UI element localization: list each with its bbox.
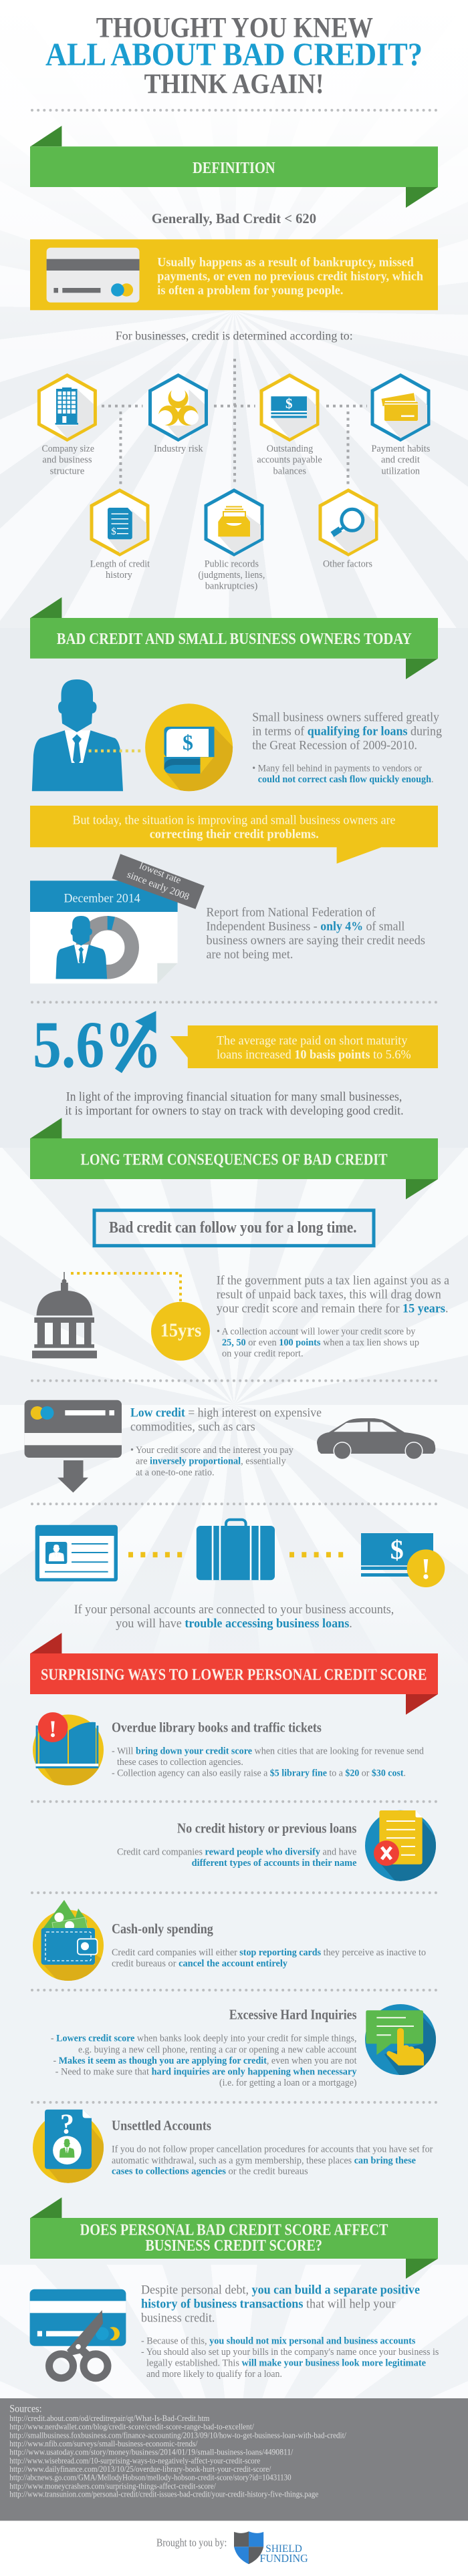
panel: sources — [0, 2398, 468, 2521]
label: utilization — [381, 466, 420, 476]
text: separate business history: and more likely to qualify for a loan. — [146, 2369, 282, 2380]
text: federation report: Independent Business - only 4% of small — [206, 920, 404, 934]
stat: 15 years circle: 15yrs — [160, 1321, 201, 1341]
text: separate business history: Despite personal debt, you can build a separate positive — [141, 2283, 420, 2297]
text: separate business history: - You should also set up your bills in the company's name once your business is — [141, 2347, 439, 2358]
label: Other factors — [323, 558, 372, 569]
banner: definition — [30, 126, 438, 208]
text — [112, 2117, 433, 2177]
callout: situation improving — [30, 806, 438, 864]
icon: car — [317, 1418, 435, 1459]
icon: business loan money with alert — [361, 1533, 445, 1587]
icon: briefcase — [197, 1520, 275, 1580]
ribbon: lowest rate since early 2008 — [112, 854, 205, 909]
callout text: payments, or even no previous credit history, which — [157, 269, 423, 283]
callout text — [157, 255, 423, 297]
text: separate business history: history of business transactions that will help your — [141, 2297, 396, 2311]
sponsor credit: SHIELD — [265, 2543, 302, 2555]
panel: december 2014 report calendar — [30, 880, 178, 983]
panel: sources: http://www.nerdwallet.com/blog/credit-score/credit-score-range-bad-to-excellent/ — [9, 2422, 254, 2432]
icon: gray credit card with down arrow — [25, 1400, 122, 1492]
icon: book with alert — [33, 1712, 104, 1785]
sponsor credit: Brought to you by: — [156, 2537, 227, 2549]
callout: average rate: loans increased 10 basis points to 5.6% — [217, 1048, 411, 1062]
text: federation report — [206, 906, 425, 962]
panel: sources: http://www.transunion.com/personal-credit/credit-issues-bad-credit/your-credit-history-five-things.page — [9, 2490, 319, 2499]
text: trouble accessing loans: you will have trouble accessing business loans. — [116, 1617, 352, 1631]
text: Credit card companies will either stop reporting cards they perceive as inactive to — [112, 1947, 426, 1958]
label — [257, 444, 322, 476]
icon: money circle — [145, 703, 233, 791]
text: - Collection agency can also easily raise a $5 library fine to a $20 or $30 cost. — [112, 1768, 406, 1778]
item: overdue library books — [33, 1712, 424, 1785]
label: bankruptcies) — [205, 581, 257, 592]
icon: business loan money with alert: $ — [390, 1535, 404, 1565]
factor: length of credit history — [90, 490, 150, 581]
banner: definition: DEFINITION — [193, 160, 275, 177]
text: tax lien: your credit score and remain there for 15 years. — [217, 1302, 449, 1316]
icon: questioned document: ? — [60, 2110, 74, 2140]
text: low credit: • Your credit score and the interest you pay — [130, 1445, 294, 1456]
text — [112, 1719, 424, 1778]
text: tax lien: on your credit report. — [222, 1349, 304, 1359]
text: trouble accessing loans: If your personal accounts are connected to your business accounts, — [74, 1603, 394, 1617]
text: separate business history: legally established. This will make your business look more legitimate — [146, 2358, 426, 2368]
banner: long term consequences — [30, 1118, 438, 1199]
text — [112, 1921, 426, 1969]
text: low credit: commodities, such as cars — [130, 1420, 255, 1434]
business credit intro: For businesses, credit is determined according to: — [116, 329, 353, 342]
factor: company size — [39, 375, 95, 476]
icon: money circle: $ — [183, 730, 193, 754]
text: low credit: are inversely proportional, essentially — [136, 1456, 286, 1467]
text: If you do not follow proper cancellation procedures for accounts that you have set for — [112, 2144, 433, 2155]
text: stay on track — [65, 1090, 404, 1118]
title — [45, 13, 423, 100]
sponsor credit: FUNDING — [259, 2552, 308, 2565]
icon: government building — [32, 1272, 97, 1358]
panel: sources: http://credit.about.com/od/creditrepair/qt/What-Is-Bad-Credit.htm — [9, 2414, 210, 2423]
callout: average rate — [170, 1025, 438, 1068]
factor: accounts payable: $ — [285, 395, 292, 412]
text: Overdue library books and traffic tickets — [112, 1719, 322, 1735]
callout: situation improving: But today, the situation is improving and small business owners are — [72, 813, 396, 827]
banner: does personal bad credit score affect business credit score — [30, 2197, 438, 2279]
text: recession impact: Small business owners suffered greatly — [252, 710, 439, 724]
ribbon: lowest rate since early 2008: since early 2008 — [126, 869, 191, 903]
label: Company size — [41, 444, 94, 454]
text: Unsettled Accounts — [112, 2117, 211, 2133]
text: - Need to make sure that hard inquiries are only happening when necessary — [55, 2066, 357, 2077]
stat: 15 years circle — [151, 1302, 210, 1361]
banner: does personal bad credit score affect business credit score: BUSINESS CREDIT SCORE? — [145, 2237, 322, 2255]
title: THINK AGAIN! — [144, 69, 324, 100]
callout text: Usually happens as a result of bankruptcy, missed — [157, 255, 414, 269]
text: recession impact — [252, 710, 442, 785]
text: (i.e. for getting a loan or a mortgage) — [219, 2078, 357, 2088]
icon: questioned document — [33, 2110, 104, 2183]
factor: accounts payable — [257, 375, 322, 476]
factor: other factors — [320, 490, 376, 569]
factor: payment habits — [371, 375, 430, 476]
panel: definition callout — [30, 239, 438, 310]
text: tax lien: • A collection account will lower your credit score by — [217, 1326, 416, 1337]
callout box: bad credit can follow you — [94, 1211, 374, 1246]
callout box: bad credit can follow you: Bad credit can follow you for a long time. — [109, 1219, 357, 1237]
text: - Lowers credit score when banks look deeply into your credit for simple things, — [51, 2034, 357, 2044]
icon: chat bubble with hand — [365, 2004, 436, 2075]
title: ALL ABOUT BAD CREDIT? — [45, 35, 423, 72]
item: cash-only spending — [33, 1900, 425, 1981]
icon: business loan money with alert: ! — [421, 1553, 431, 1585]
icon: business owner — [32, 679, 123, 791]
text: tax lien — [217, 1274, 450, 1359]
callout text: is often a problem for young people. — [157, 283, 343, 297]
text: stay on track: it is important for owners to stay on track with developing good credit. — [65, 1104, 404, 1118]
icon: shield logo — [234, 2531, 263, 2564]
title: THOUGHT YOU KNEW — [96, 13, 373, 44]
text: separate business history: business credit. — [141, 2311, 215, 2325]
label: history — [106, 570, 132, 581]
label: structure — [50, 466, 85, 476]
text: Cash-only spending — [112, 1921, 213, 1937]
text: No credit history or previous loans — [177, 1820, 357, 1836]
panel: sources: http://www.usatoday.com/story/money/business/2014/01/19/small-business-loans/4490811/ — [9, 2448, 294, 2457]
text: e.g. buying a new cell phone, renting a car or opening a new cable account — [78, 2044, 357, 2055]
text: recession impact: the Great Recession of 2009-2010. — [252, 738, 417, 752]
panel: sources: http://www.moneycrashers.com/surprising-things-affect-credit-score/ — [9, 2481, 216, 2490]
text — [117, 1820, 357, 1869]
label: Outstanding — [267, 444, 314, 454]
text: tax lien: 25, 50 or even 100 points when a tax lien shows up — [222, 1337, 419, 1348]
banner: surprising ways — [30, 1633, 438, 1715]
chart: 4% donut — [83, 916, 132, 972]
label: Industry risk — [154, 444, 203, 454]
text: low credit: at a one-to-one ratio. — [136, 1467, 214, 1478]
label: accounts payable — [257, 455, 322, 466]
text: low credit: Low credit = high interest on expensive — [130, 1406, 322, 1420]
factor: public records — [198, 490, 265, 592]
text: - Will bring down your credit score when cities that are looking for revenue send — [112, 1746, 424, 1757]
label: Payment habits — [371, 444, 430, 454]
label: Length of credit — [90, 558, 150, 569]
text: federation report: Report from National Federation of — [206, 906, 376, 920]
panel: sources: http://smallbusiness.foxbusiness.com/finance-accounting/2013/09/10/how-to-get-business-loan-with-bad-credit/ — [9, 2430, 346, 2440]
icon: rejected document — [365, 1810, 436, 1881]
text: separate business history: - Because of this, you should not mix personal and business accounts — [141, 2336, 416, 2346]
text: different types of accounts in their name — [192, 1858, 357, 1869]
ribbon: lowest rate since early 2008: lowest rate — [138, 860, 183, 886]
label: Public records — [205, 558, 259, 569]
icon: personal id card — [35, 1525, 118, 1581]
panel: december 2014 report calendar: December 2014 — [64, 892, 140, 906]
banner: does personal bad credit score affect business credit score: DOES PERSONAL BAD CREDIT SCORE AFFECT — [80, 2222, 388, 2239]
icon: small business owner — [55, 916, 107, 979]
icon: credit card back — [47, 248, 139, 303]
label: and credit — [381, 455, 421, 466]
text: separate business history — [141, 2283, 439, 2380]
text: cases to collections agencies or the credit bureaus — [112, 2166, 308, 2177]
text: automatic withdrawal, such as a gym membership, these places can bring these — [112, 2155, 416, 2166]
factor: industry risk — [150, 375, 206, 454]
callout: average rate: The average rate paid on short maturity — [217, 1033, 408, 1048]
text: federation report: are not being met. — [206, 948, 293, 962]
banner: bad credit and small business owners today: BAD CREDIT AND SMALL BUSINESS OWNERS TODAY — [57, 631, 412, 648]
panel: sources: Sources: — [9, 2404, 42, 2415]
dotted connectors — [102, 359, 367, 484]
text: recession impact: in terms of qualifying for loans during — [252, 724, 442, 738]
text: these cases to collection agencies. — [117, 1757, 243, 1768]
item: no credit history — [117, 1810, 441, 1884]
label: (judgments, liens, — [198, 570, 265, 581]
text: Excessive Hard Inquiries — [229, 2006, 357, 2022]
text: - Makes it seem as though you are applying for credit, even when you are not — [53, 2056, 357, 2066]
text: federation report: business owners are saying their credit needs — [206, 934, 425, 948]
icon: book with alert: ! — [49, 1716, 57, 1742]
stat: 5.6% with arrow: 5.6% — [33, 1007, 162, 1082]
callout: situation improving: correcting their credit problems. — [150, 827, 319, 841]
label — [198, 558, 265, 592]
sponsor credit — [156, 2531, 308, 2565]
factor: length of credit history: $ — [111, 526, 116, 537]
icon: credit card cut by scissors — [30, 2289, 126, 2378]
text: stay on track: In light of the improving financial situation for many small businesses, — [66, 1090, 402, 1104]
banner: long term consequences: LONG TERM CONSEQUENCES OF BAD CREDIT — [80, 1151, 388, 1168]
item: unsettled accounts — [33, 2110, 433, 2191]
text — [51, 2006, 357, 2088]
panel: sources: http://www.dailyfinance.com/2013/10/25/overdue-library-book-hurt-your-credit-score/ — [9, 2464, 271, 2474]
text: low credit — [130, 1406, 322, 1478]
label: and business — [42, 455, 92, 466]
definition score line: Generally, Bad Credit < 620 — [152, 210, 316, 226]
item: excessive hard inquiries — [51, 2004, 441, 2088]
text: Credit card companies reward people who diversify and have — [117, 1847, 357, 1858]
panel: sources: http://www.nfib.com/surveys/small-business-economic-trends/ — [9, 2439, 198, 2448]
text: trouble accessing loans — [74, 1603, 394, 1631]
panel: sources: http://www.wisebread.com/10-surprising-ways-to-negatively-affect-your-credit-score — [9, 2456, 261, 2465]
label — [90, 558, 150, 581]
text: recession impact: • Many fell behind in payments to vendors or — [252, 763, 422, 774]
text: tax lien: result of unpaid back taxes, this will drag down — [217, 1288, 441, 1302]
label — [371, 444, 430, 476]
text: credit bureaus or cancel the account entirely — [112, 1958, 287, 1969]
text: tax lien: If the government puts a tax lien against you as a — [217, 1274, 450, 1288]
text: recession impact: could not correct cash flow quickly enough. — [258, 774, 434, 785]
banner: bad credit and small business owners today — [30, 597, 438, 679]
panel: sources: http://abcnews.go.com/GMA/MellodyHobson/mellody-hobson-credit-score/story?id=10431130 — [9, 2473, 291, 2482]
label — [41, 444, 94, 476]
label: balances — [273, 466, 306, 476]
icon: wallet with cash — [33, 1900, 104, 1981]
